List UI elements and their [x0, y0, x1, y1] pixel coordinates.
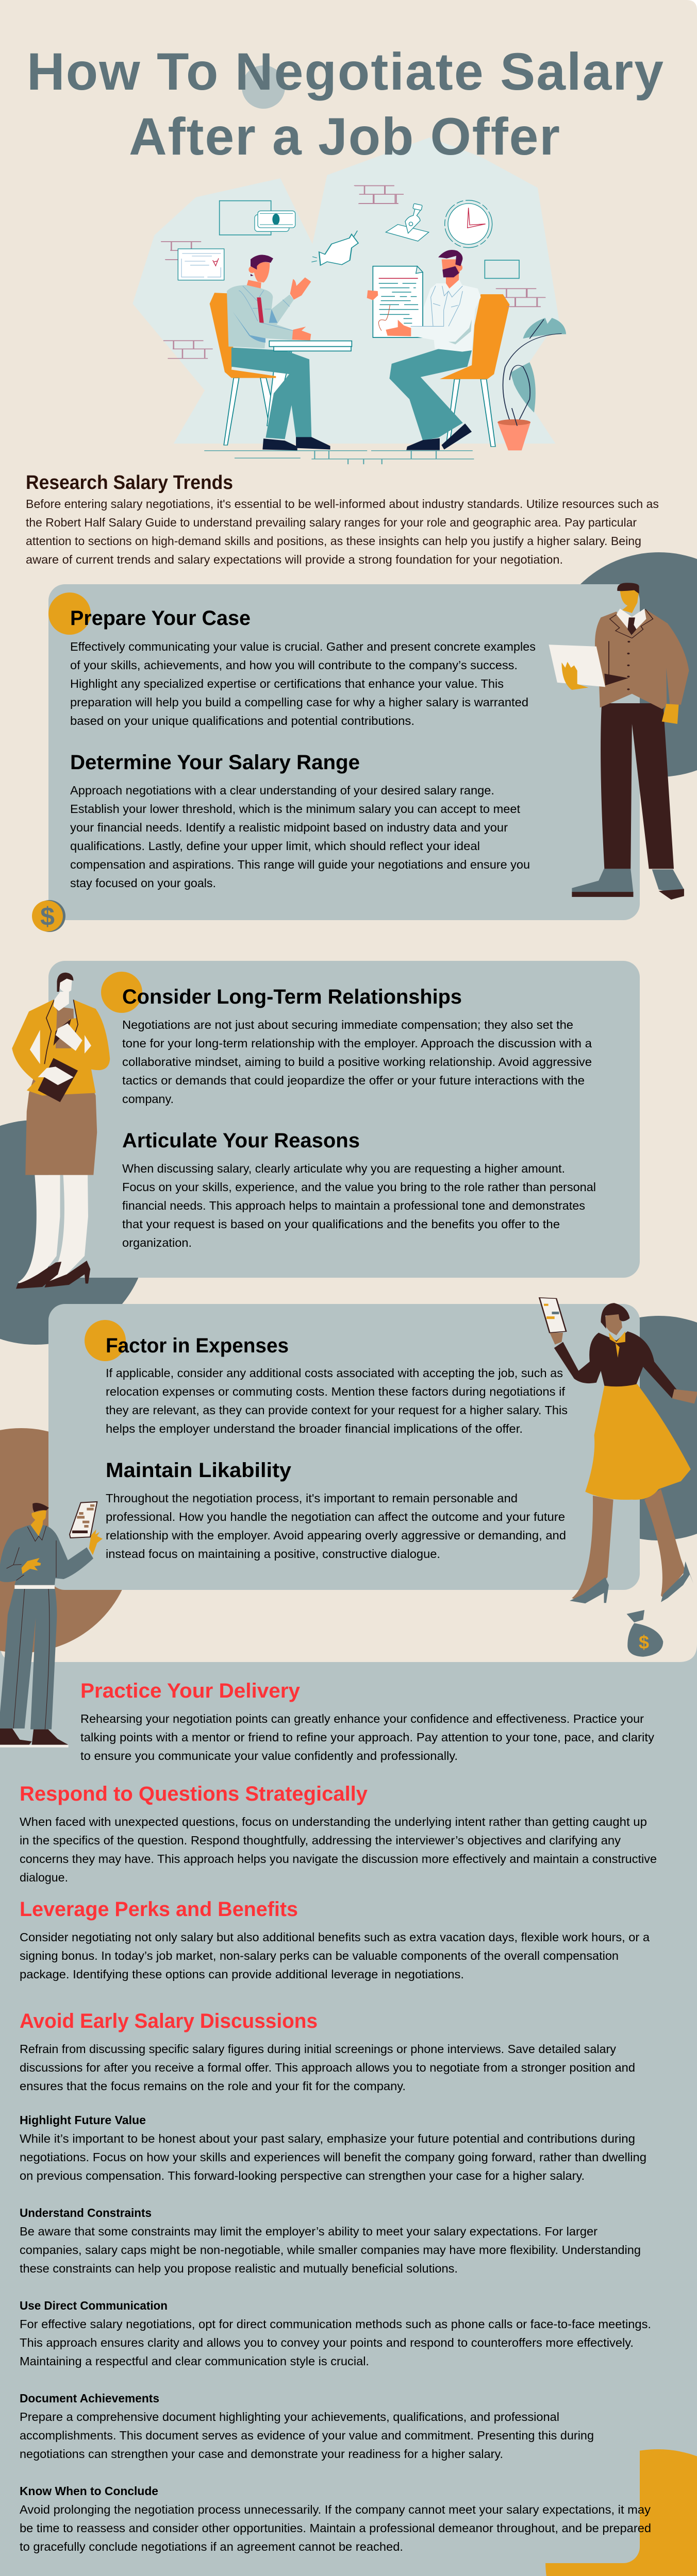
decorative circle behind title — [242, 65, 285, 109]
icon: orange circle — [48, 592, 91, 635]
text block: articulate your reasons: financial needs. This approach helps to maintain a professional tone and demonstrates — [122, 1199, 585, 1212]
blob: orange lower right — [0, 2421, 697, 2576]
text block: avoid early salary discussions: ensures that the focus remains on the role and your fit for the company. — [20, 2079, 406, 2093]
text block: practice your delivery — [80, 1712, 655, 1762]
text block: determine your salary range: qualifications. Lastly, define your upper limit, which should reflect your ideal — [70, 839, 480, 853]
text block: document achievements — [20, 2410, 594, 2461]
title — [27, 42, 663, 166]
figure: woman in orange jacket holding notebook — [12, 973, 110, 1289]
left group detail — [161, 201, 352, 351]
right man — [411, 279, 481, 352]
blob behind first panel — [546, 552, 697, 777]
text block: prepare your case — [70, 640, 536, 727]
text block: leverage perks: package. Identifying these options can provide additional leverage in negotiations. — [20, 1968, 464, 1981]
blob behind second panel — [0, 1120, 148, 1345]
text block: research salary trends: Before entering salary negotiations, it's essential to be well-informed about industry standards. Utilize resources such as — [26, 497, 659, 511]
text block: consider long-term relationships — [122, 1018, 592, 1106]
text block: understand constraints: these constraints can help you propose realistic and mutually beneficial solutions. — [20, 2262, 458, 2275]
icon: orange circle — [101, 972, 142, 1013]
text block: practice your delivery: to ensure you communicate your value confidently and professionally. — [80, 1749, 458, 1762]
text block: maintain likability — [106, 1492, 566, 1561]
panel: long-term relationships and reasons — [48, 961, 640, 1278]
blob: brown left of third panel — [0, 1428, 134, 1653]
icon: money bag — [627, 1610, 663, 1657]
text block: know when to conclude: be time to reassess and consider other opportunities. Maintain a professional demeanor throughout, and be prepared — [20, 2521, 651, 2535]
left trousers — [231, 347, 311, 439]
text block: consider long-term relationships: tone for your long-term relationship with the employer. Approach the discussion with a — [122, 1037, 592, 1050]
text block: know when to conclude: Avoid prolonging the negotiation process unnecessarily. If the company cannot meet your salary expectations, it may — [20, 2503, 651, 2516]
heading: maintain likability: Maintain Likability — [106, 1459, 292, 1482]
text block: understand constraints — [20, 2225, 641, 2275]
right group detail — [354, 185, 545, 352]
text block: determine your salary range: stay focused on your goals. — [70, 876, 216, 890]
text block: document achievements: negotiations can strengthen your case and demonstrate your readiness for a higher salary. — [20, 2447, 503, 2461]
text block: determine your salary range: your financial needs. Identify a realistic midpoint based on industry data and your — [70, 821, 508, 834]
text block: leverage perks — [20, 1930, 650, 1981]
illustration: two people negotiating at a table — [132, 138, 566, 464]
pen and contract — [386, 225, 429, 241]
contract document — [373, 266, 423, 337]
subheading: use direct communication: Use Direct Communication — [20, 2299, 168, 2312]
text block: highlight future value: negotiations. Focus on how your skills and experiences will benefit the company going forward, rather than dwelling — [20, 2150, 646, 2164]
icon: money bag: $ — [639, 1632, 649, 1653]
text block: know when to conclude: to gracefully conclude negotiations if an agreement cannot be reached. — [20, 2540, 403, 2553]
blob: teal right of third panel — [546, 1316, 697, 1540]
heading: Research Salary Trends: Research Salary Trends — [26, 472, 233, 494]
clock — [448, 204, 489, 244]
text block: determine your salary range: Establish your lower threshold, which is the minimum salary you can accept to meet — [70, 802, 521, 816]
text block: factor in expenses: they are relevant, as they can provide context for your request for a higher salary. This — [106, 1403, 568, 1417]
panel: practice your delivery and strategies — [20, 1680, 657, 2461]
figure: man in brown jacket holding tablet — [549, 583, 689, 900]
text block: document achievements: accomplishments. This document serves as evidence of your value and commitment. Presenting this during — [20, 2429, 594, 2442]
subheading: understand constraints: Understand Constraints — [20, 2206, 152, 2219]
text block: respond to questions: in the specifics of the question. Respond thoughtfully, addressing the interviewer’s objectives and clarifying any — [20, 1834, 621, 1847]
figure: woman in yellow skirt holding phone — [539, 1298, 697, 1603]
text block: maintain likability: professional. How you handle the negotiation can affect the outcome and your future — [106, 1510, 565, 1523]
text block: understand constraints: companies, salary caps might be non-negotiable, while smaller companies may have more flexibility. Understanding — [20, 2243, 641, 2257]
text block: highlight future value: While it’s important to be honest about your past salary, emphasize your future potential and contributions during — [20, 2132, 635, 2145]
text block: articulate your reasons: Focus on your skills, experience, and the value you bring to the role rather than personal — [122, 1180, 596, 1194]
heading: prepare your case: Prepare Your Case — [70, 607, 251, 630]
text block: avoid early salary discussions: discussions for after you receive a formal offer. This approach allows you to negotiate from a stronger position and — [20, 2061, 635, 2074]
text block: consider long-term relationships: company. — [122, 1092, 174, 1106]
heading: avoid early salary discussions: Avoid Early Salary Discussions — [20, 2010, 318, 2032]
heading: practice your delivery: Practice Your Delivery — [80, 1680, 301, 1702]
text block: avoid early salary discussions: Refrain from discussing specific salary figures during initial screenings or phone interviews. Save detailed salary — [20, 2042, 616, 2056]
text block: factor in expenses: If applicable, consider any additional costs associated with accepting the job, such as — [106, 1366, 563, 1380]
heading: articulate your reasons: Articulate Your Reasons — [122, 1129, 360, 1152]
text block: factor in expenses: helps the employer understand the broader financial implications of the offer. — [106, 1422, 523, 1435]
text block: use direct communication: For effective salary negotiations, opt for direct communication methods such as phone calls or face-to-face meetings. — [20, 2317, 651, 2331]
text block: maintain likability: instead focus on maintaining a positive, constructive dialogue. — [106, 1547, 440, 1561]
right trousers — [389, 349, 472, 440]
text block: highlight future value: on previous compensation. This forward-looking perspective can strengthen your case for a higher salary. — [20, 2169, 585, 2182]
text block: leverage perks: Consider negotiating not only salary but also additional benefits such as extra vacation days, flexible work hours, or a — [20, 1930, 650, 1944]
text block: respond to questions: concerns they may have. This approach helps you navigate the discussion more effectively and maintain a constructive — [20, 1852, 657, 1866]
text block: articulate your reasons: that your request is based on your qualifications and the benefits you offer to the — [122, 1217, 560, 1231]
title: How To Negotiate Salary — [27, 42, 663, 101]
text block: highlight future value — [20, 2132, 646, 2182]
subheading: document achievements: Document Achievements — [20, 2392, 159, 2405]
heading: factor in expenses: Factor in Expenses — [106, 1334, 289, 1357]
left man — [246, 280, 261, 294]
text block: consider long-term relationships: tactics or demands that could jeopardize the offer or your future interactions with the — [122, 1074, 585, 1087]
text block: determine your salary range: compensation and aspirations. This range will guide your negotiations and ensure you — [70, 858, 530, 871]
text block: respond to questions: dialogue. — [20, 1871, 68, 1884]
heading: consider long-term relationships: Consider Long-Term Relationships — [122, 986, 462, 1008]
text block: avoid early salary discussions — [20, 2042, 635, 2093]
panel: expenses and likability — [48, 1304, 640, 1590]
text block: document achievements: Prepare a comprehensive document highlighting your achievements, qualifications, and professional — [20, 2410, 559, 2424]
plant and pot — [510, 318, 566, 413]
text block: prepare your case: of your skills, achievements, and how you will contribute to the company’s success. — [70, 658, 518, 672]
icon: orange circle — [85, 1320, 126, 1361]
text block: respond to questions — [20, 1815, 657, 1884]
icon: dollar coin — [32, 900, 65, 932]
text block: use direct communication — [20, 2317, 651, 2368]
text block: practice your delivery: talking points with a mentor or friend to refine your approach. Pay attention to your tone, pace, and clarity — [80, 1731, 655, 1744]
text block: prepare your case: based on your unique qualifications and potential contributions. — [70, 714, 414, 727]
text block: consider long-term relationships: Negotiations are not just about securing immediate compensation; they also set the — [122, 1018, 573, 1031]
text block: use direct communication: This approach ensures clarity and allows you to convey your points and respond to counteroffers more effectively. — [20, 2336, 634, 2349]
text block: determine your salary range: Approach negotiations with a clear understanding of your desired salary range. — [70, 784, 494, 797]
text block: articulate your reasons: When discussing salary, clearly articulate why you are requesting a higher amount. — [122, 1162, 565, 1175]
text block: respond to questions: When faced with unexpected questions, focus on understanding the underlying intent rather than getting caught up — [20, 1815, 647, 1828]
text block: factor in expenses: relocation expenses or commuting costs. Mention these factors during negotiations if — [106, 1385, 566, 1398]
icon: handshake — [319, 234, 358, 265]
text block: determine your salary range — [70, 784, 530, 890]
text block: research salary trends — [26, 497, 659, 566]
panel: prepare and salary range — [48, 584, 640, 920]
heading: respond to questions strategically: Respond to Questions Strategically — [20, 1783, 368, 1805]
subheading: highlight future value: Highlight Future Value — [20, 2113, 146, 2127]
text block: research salary trends: aware of current trends and salary expectations will provide a strong foundation for your negotiation. — [26, 553, 563, 566]
text block: maintain likability: Throughout the negotiation process, it's important to remain personable and — [106, 1492, 518, 1505]
heading: determine your salary range: Determine Your Salary Range — [70, 751, 360, 774]
text block: consider long-term relationships: collaborative mindset, aiming to build a positive working relationship. Avoid aggressive — [122, 1055, 592, 1069]
text block: maintain likability: relationship with the employer. Avoid appearing overly aggressive or demanding, and — [106, 1529, 566, 1542]
chair legs and table legs — [224, 352, 495, 447]
text block: understand constraints: Be aware that some constraints may limit the employer’s ability to meet your salary expectations. For larger — [20, 2225, 598, 2238]
heading: leverage perks and benefits: Leverage Perks and Benefits — [20, 1898, 298, 1921]
text block: practice your delivery: Rehearsing your negotiation points can greatly enhance your confidence and effectiveness. Practice your — [80, 1712, 644, 1725]
text block: prepare your case: Highlight any specialized expertise or certifications that enhance your value. This — [70, 677, 504, 690]
text block: use direct communication: Maintaining a respectful and clear communication style is crucial. — [20, 2354, 369, 2368]
text block: leverage perks: signing bonus. In today’s job market, non-salary perks can be valuable components of the overall compensation — [20, 1949, 619, 1962]
title: After a Job Offer — [129, 107, 560, 166]
text block: research salary trends: the Robert Half Salary Guide to understand prevailing salary ranges for your role and geographic area. Pay particular — [26, 516, 637, 529]
text block: articulate your reasons: organization. — [122, 1236, 192, 1249]
figure: man in teal shirt holding phone — [0, 1502, 103, 1748]
text block: research salary trends: attention to sections on high-demand skills and positions, as these insights can help you justify a higher salary. Being — [26, 534, 641, 548]
text block: factor in expenses — [106, 1366, 568, 1435]
text block: prepare your case: Effectively communicating your value is crucial. Gather and present concrete examples — [70, 640, 536, 653]
text block: articulate your reasons — [122, 1162, 596, 1249]
icon: dollar coin: $ — [40, 902, 55, 931]
text block: know when to conclude — [20, 2503, 651, 2553]
subheading: know when to conclude: Know When to Conclude — [20, 2484, 158, 2498]
text block: prepare your case: preparation will help you build a compelling case for why a higher salary is warranted — [70, 696, 528, 709]
